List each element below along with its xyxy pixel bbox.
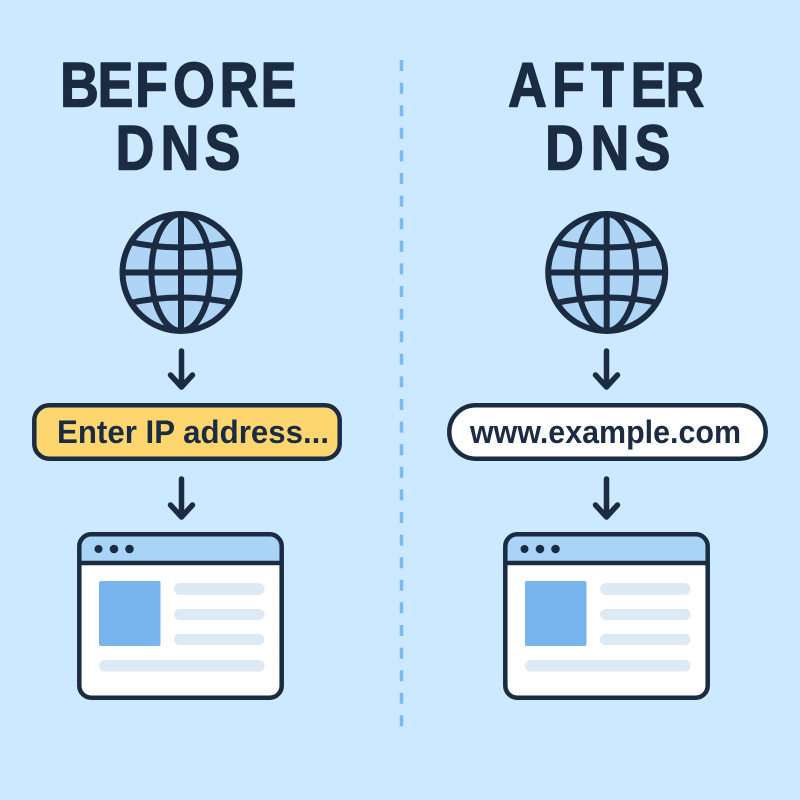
heading: after DNS [508, 50, 704, 184]
arrow: globe to input [170, 351, 192, 387]
icon: browser window [505, 534, 708, 698]
arrow: globe to address bar [596, 351, 618, 387]
heading: after DNS: DNS [545, 113, 670, 184]
input: domain name: www.example.com [469, 414, 741, 450]
arrow: input to browser [170, 479, 192, 517]
panel: after DNS [449, 50, 766, 698]
icon: globe [545, 210, 669, 334]
panel: before DNS [34, 50, 340, 698]
arrow: address bar to browser [596, 479, 618, 517]
heading: before DNS: DNS [116, 113, 240, 184]
heading: after DNS: AFTER [508, 50, 704, 121]
heading: before DNS [60, 50, 296, 184]
input: domain name [449, 405, 766, 459]
center divider [400, 60, 403, 727]
icon: globe [119, 210, 243, 334]
input: IP address [34, 405, 340, 459]
icon: browser window [79, 534, 282, 698]
input: IP address: Enter IP address... [57, 414, 329, 450]
heading: before DNS: BEFORE [60, 50, 296, 121]
